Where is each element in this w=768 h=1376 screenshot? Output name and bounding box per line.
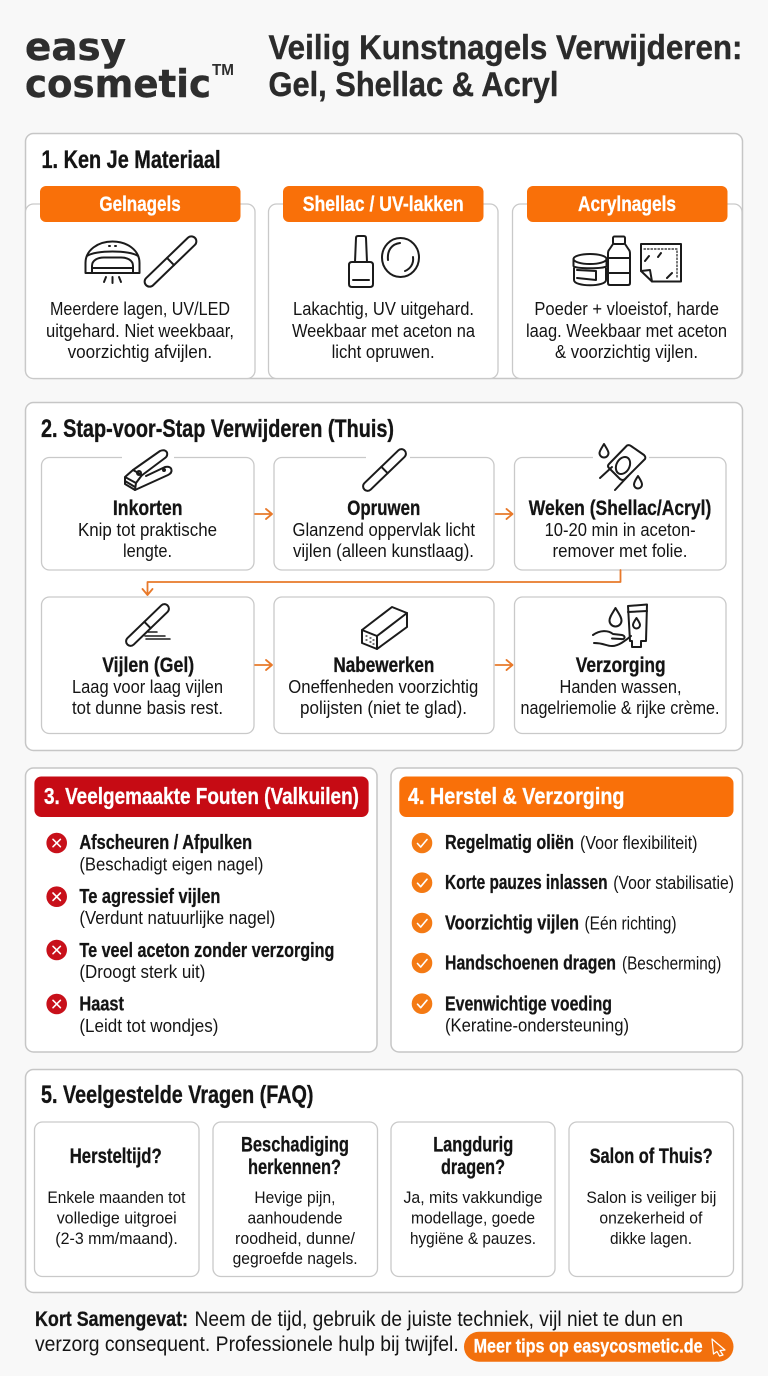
panel: 4. Herstel & Verzorging [391,768,742,1052]
heading: section 1: 1. Ken Je Materiaal [42,146,220,174]
panel: 1. Ken Je Materiaal [26,134,742,378]
item: Te agressief vijlen: Te agressief vijlen [79,885,220,908]
item: Afscheuren: Afscheuren / Afpulken [79,831,252,854]
step: Opruwen: Glanzend oppervlak licht [292,520,475,540]
icon: cursor [712,1339,725,1356]
step: Weken: Weken (Shellac/Acryl) [529,497,711,520]
faq: Hersteltijd: volledige uitgroei [57,1209,177,1228]
faq: Salon of Thuis: Salon is veiliger bij [586,1188,716,1207]
icon: file with filing marks [124,602,171,648]
step: Nabewerken [274,597,494,734]
faq: Salon of Thuis [569,1122,734,1276]
title: Gel, Shellac & Acryl [268,66,558,104]
faq: Langdurig dragen: dragen? [441,1156,505,1179]
faq: Beschadiging herkennen [213,1122,378,1276]
title [268,29,742,104]
item: Haast: (Leidt tot wondjes) [79,1015,218,1036]
step: Verzorging: Verzorging [576,654,666,677]
item: Regelmatig oliën [412,831,698,854]
logo: easycosmetic: easy [25,25,126,69]
item: Evenwichtige voeding: (Keratine-ondersteuning) [445,1015,629,1036]
item: Te veel aceton: Te veel aceton zonder verzorging [79,939,334,962]
icon: buffer block [362,607,407,649]
item: Evenwichtige voeding: Evenwichtige voeding [445,992,612,1015]
item: Afscheuren [46,831,263,874]
step: Inkorten: Inkorten [113,497,182,520]
panel: 2. Stap-voor-Stap Verwijderen [26,402,742,750]
summary text: verzorg consequent. Professionele hulp bij twijfel. [35,1332,459,1356]
card: Gelnagels: Gelnagels [99,193,181,216]
faq: Beschadiging herkennen: herkennen? [248,1156,341,1179]
item: Te agressief vijlen [46,885,275,928]
item: Korte pauzes: Korte pauzes inlassen [445,871,608,894]
card: Shellac / UV-lakken: Shellac / UV-lakken [303,193,464,216]
faq: Beschadiging herkennen: gegroefde nagels. [233,1249,358,1268]
item: Afscheuren: (Beschadigt eigen nagel) [79,854,263,874]
heading: section 5: 5. Veelgestelde Vragen (FAQ) [41,1081,314,1109]
card: Shellac / UV-lakken: Lakachtig, UV uitgehard. [293,299,474,319]
icon: nail clipper [125,450,172,490]
call to action pill: Meer tips op easycosmetic.de [474,1337,703,1358]
step: Inkorten: Knip tot praktische [78,520,217,540]
faq: Langdurig dragen: Ja, mits vakkundige [404,1188,542,1207]
heading: section 4 [399,776,734,817]
panel: 3. Veelgemaakte Fouten [26,768,377,1052]
logo: easycosmetic [25,25,234,106]
logo: easycosmetic: TM [212,62,234,79]
heading: section 4: 4. Herstel & Verzorging [408,783,624,809]
step: Opruwen [274,447,494,570]
card: Acrylnagels: laag. Weekbaar met aceton [526,321,727,341]
arrow [496,509,512,519]
faq: Langdurig dragen: modellage, goede [411,1209,535,1228]
heading: section 3: 3. Veelgemaakte Fouten (Valkuilen) [44,783,359,809]
card: Shellac / UV-lakken: licht opruwen. [332,342,435,362]
item: Handschoenen dragen: Handschoenen dragen [445,952,616,975]
item: Regelmatig oliën: (Voor flexibiliteit) [580,832,698,853]
icon: polish bottle and buffer disc [349,236,419,287]
card: Gelnagels: Meerdere lagen, UV/LED [50,299,230,319]
faq: Beschadiging herkennen: roodheid, dunne/ [235,1229,355,1248]
summary text [35,1307,683,1356]
faq: Beschadiging herkennen: aanhoudende [248,1209,342,1228]
faq: Langdurig dragen: hygiëne & pauzes. [410,1229,536,1248]
card: Gelnagels: uitgehard. Niet weekbaar, [46,321,234,341]
step: Verzorging [514,597,726,734]
arrow: connector to next row [142,570,620,595]
item: Evenwichtige voeding [412,992,629,1036]
step: Inkorten [42,450,254,570]
card: Gelnagels [26,186,255,378]
item: Haast: Haast [79,992,124,1016]
faq: Hersteltijd: Enkele maanden tot [47,1188,186,1207]
icon: UV lamp and nail file [86,234,198,289]
arrow [255,509,272,519]
heading: section 2: 2. Stap-voor-Stap Verwijderen (Thuis) [41,415,394,443]
faq: Beschadiging herkennen: Beschadiging [241,1134,349,1157]
item: Voorzichtig vijlen [412,911,676,934]
step: Verzorging: Handen wassen, [560,677,682,697]
step: Weken: 10-20 min in aceton- [545,520,696,540]
card: Acrylnagels [512,186,742,378]
item: Te agressief vijlen: (Verdunt natuurlijke nagel) [79,907,275,928]
step: Weken [514,444,726,570]
item: Voorzichtig vijlen: Voorzichtig vijlen [445,911,579,934]
card: Shellac / UV-lakken: Weekbaar met aceton na [292,321,476,341]
panel: 5. Veelgestelde Vragen [26,1070,742,1292]
card: Gelnagels: voorzichtig afvijlen. [68,342,212,362]
item: Korte pauzes: (Voor stabilisatie) [613,872,734,893]
icon: hand, drop and cream tube [593,604,647,647]
faq: Hersteltijd: Hersteltijd? [70,1145,162,1168]
summary text: Neem de tijd, gebruik de juiste techniek, vijl niet te dun en [194,1307,683,1331]
icon: nail file [361,447,408,493]
logo: easycosmetic: cosmetic [25,62,211,106]
item: Regelmatig oliën: Regelmatig oliën [445,831,574,854]
faq: Beschadiging herkennen: Hevige pijn, [254,1188,335,1207]
item: Te veel aceton: (Droogt sterk uit) [79,961,205,982]
item: Te veel aceton [46,939,334,982]
step: Weken: remover met folie. [552,541,688,561]
item: Haast [46,992,218,1036]
card: Acrylnagels: Acrylnagels [578,193,676,216]
step: Nabewerken: polijsten (niet te glad). [300,698,467,718]
card: Acrylnagels: Poeder + vloeistof, harde [534,299,719,319]
summary text: Kort Samengevat: [35,1307,188,1331]
call to action pill [464,1332,734,1362]
step: Verzorging: nagelriemolie & rijke crème. [520,698,720,718]
arrow [255,660,272,670]
card: Shellac / UV-lakken [268,186,498,378]
item: Handschoenen dragen: (Bescherming) [622,953,721,974]
icon: foil wrapped nail with drops [600,444,645,490]
item: Voorzichtig vijlen: (Eén richting) [584,912,676,933]
arrow [496,660,512,670]
step: Vijlen: Laag voor laag vijlen [72,677,223,697]
faq: Hersteltijd [34,1122,199,1276]
faq: Hersteltijd: (2-3 mm/maand). [55,1229,178,1248]
step: Inkorten: lengte. [123,541,172,561]
faq: Salon of Thuis: Salon of Thuis? [590,1145,713,1168]
card: Acrylnagels: & voorzichtig vijlen. [555,342,698,362]
item: Korte pauzes [412,871,734,894]
step: Vijlen [42,597,254,734]
step: Opruwen: Opruwen [347,497,420,520]
faq: Salon of Thuis: dikke lagen. [610,1229,692,1248]
step: Opruwen: vijlen (alleen kunstlaag). [293,541,474,561]
heading: section 3 [34,776,369,817]
icon: powder jar, liquid bottle and foil [574,236,681,285]
step: Nabewerken: Nabewerken [333,654,434,677]
step: Nabewerken: Oneffenheden voorzichtig [288,677,478,697]
step: Vijlen: tot dunne basis rest. [72,698,223,718]
faq: Salon of Thuis: onzekerheid of [599,1209,703,1228]
faq: Langdurig dragen [391,1122,555,1276]
step: Vijlen: Vijlen (Gel) [102,654,194,677]
faq: Langdurig dragen: Langdurig [433,1134,513,1157]
